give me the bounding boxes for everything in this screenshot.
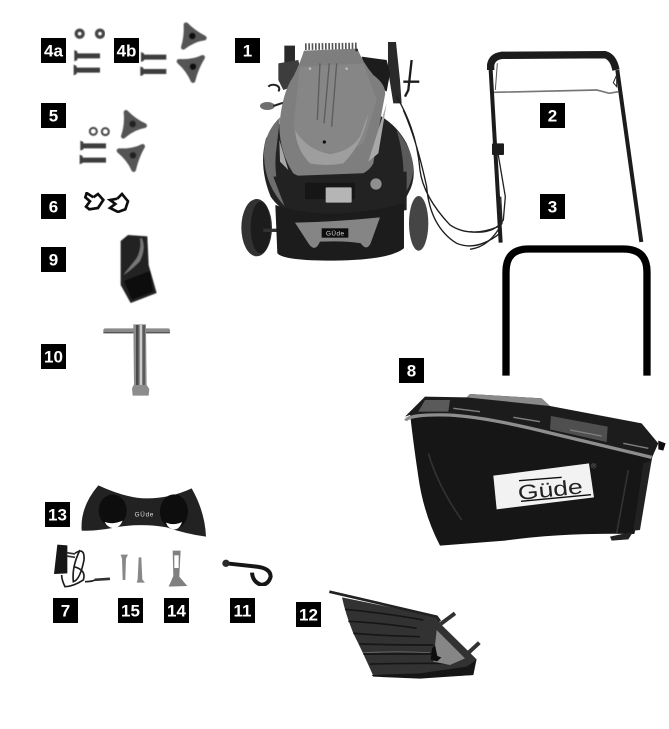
label 11: 11 [234, 602, 251, 620]
brand patch [493, 463, 594, 509]
part 8: grass bag [405, 394, 666, 546]
label 15: 15 [121, 602, 140, 620]
lid [405, 394, 658, 458]
engine side parts [278, 60, 303, 90]
label 3: 3 [548, 198, 557, 216]
label 13 [45, 502, 70, 527]
part 4b: bolts and star knobs [140, 25, 204, 81]
label 1: 1 [243, 42, 252, 60]
part 9: plug guard [121, 235, 157, 303]
label 4b [114, 38, 139, 63]
label 4a: 4a [44, 42, 63, 60]
label 10 [41, 344, 66, 369]
part 14: bracket [169, 551, 187, 587]
label 5: 5 [49, 106, 58, 126]
part 12: discharge flap [329, 592, 479, 679]
label 7: 7 [61, 602, 70, 620]
bag body [410, 413, 652, 546]
part 13: front cover [82, 485, 206, 537]
logo plate [322, 228, 348, 238]
part 2: upper handle [470, 55, 641, 249]
label 1 [235, 38, 260, 63]
part 6: two clips [85, 193, 128, 212]
label 10: 10 [44, 348, 63, 366]
label 6: 6 [49, 198, 58, 216]
label 5 [41, 103, 66, 128]
part 3: lower handle [506, 249, 647, 376]
part 8: grass bag: ® [591, 462, 597, 471]
label 15 [118, 598, 143, 623]
label 9: 9 [49, 250, 58, 270]
part 7: charger [54, 545, 110, 587]
label 11 [230, 598, 255, 623]
part 1: lawn mower [241, 42, 500, 261]
logo plate: GÜde [326, 229, 344, 237]
cooling fins [305, 36, 357, 57]
label 3 [540, 194, 565, 219]
label 2 [540, 103, 565, 128]
engine front block [273, 172, 407, 223]
label 4b: 4b [117, 42, 136, 60]
brand patch: Güde [517, 475, 584, 505]
label 2: 2 [548, 106, 557, 126]
label 12: 12 [299, 606, 318, 624]
part 13: front cover: GÜde [135, 510, 154, 518]
control cables [397, 97, 500, 246]
label 8 [399, 358, 424, 383]
handle posts [284, 42, 402, 103]
label 13: 13 [48, 506, 67, 524]
part 4a: nuts and bolts [74, 30, 103, 75]
part 5: washers, bolts and star knobs [80, 112, 145, 170]
label 7 [53, 598, 78, 623]
ignition key [260, 102, 275, 110]
label 6 [41, 194, 66, 219]
label 4a [41, 38, 66, 63]
label 9 [41, 247, 66, 272]
front bumper [275, 203, 404, 261]
deck [263, 105, 414, 223]
engine cover [279, 49, 385, 180]
part 11: hook [222, 560, 271, 585]
wheels [241, 199, 272, 256]
part 10: spark plug wrench [103, 324, 170, 396]
label 8: 8 [407, 362, 416, 380]
part 15: screws [121, 555, 145, 583]
label 14: 14 [167, 602, 186, 620]
label 12 [296, 602, 321, 627]
label 14 [164, 598, 189, 623]
